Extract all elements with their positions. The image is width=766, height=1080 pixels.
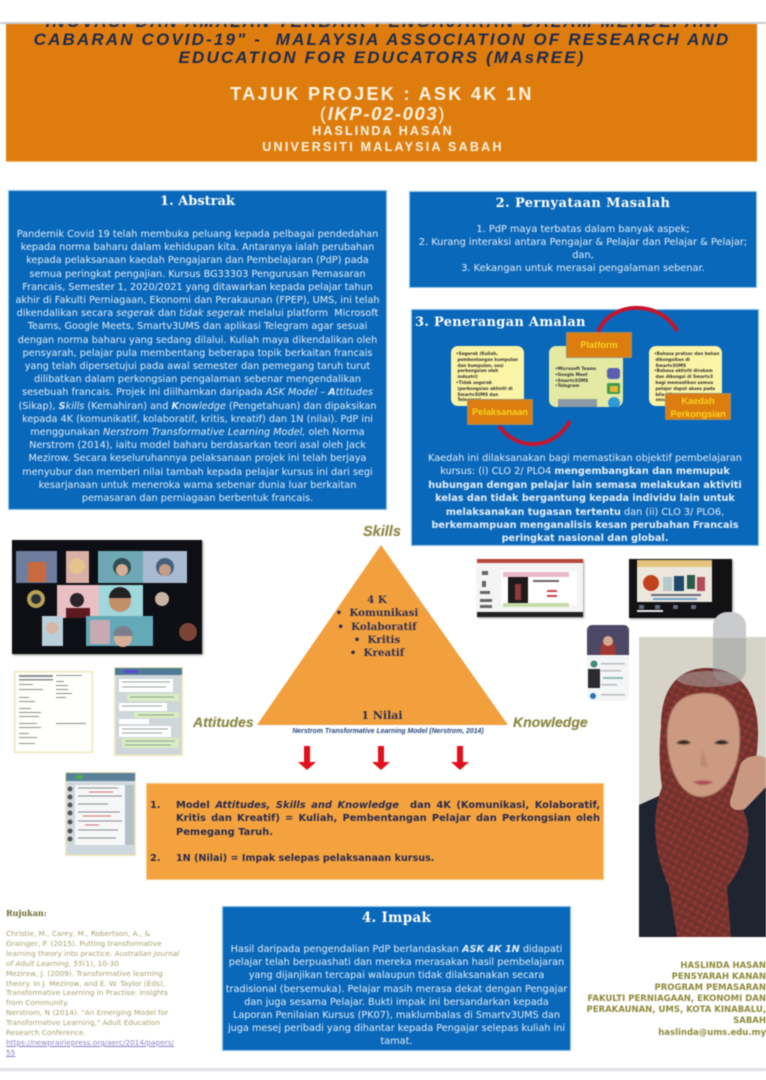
screenshot: video lecture slide	[628, 558, 734, 620]
triangle text: komunikasi: • Komunikasi	[336, 607, 418, 619]
abstract text: pemasaran dan perniagaan berbentuk francais.	[82, 493, 313, 504]
explanation text: hubungan dengan pelajar lain semasa melakukan aktiviti	[428, 480, 742, 491]
abstract text: semua peringkat pengajian. Kursus BG33303 Pengurusan Pemasaran	[29, 269, 366, 280]
label: platform: Platform	[580, 340, 618, 350]
label: platform	[566, 332, 632, 358]
impact text: pelajar telah berpuashati dan mereka merasakan hasil pembelajaran	[229, 957, 564, 968]
screenshot: presentation slide	[476, 558, 586, 620]
card: pelaksanaan text: perkongsian oleh	[457, 368, 498, 373]
problem list: 1. PdP maya terbatas dalam banyak aspek;	[476, 224, 690, 235]
hijab	[655, 668, 758, 937]
impact text	[226, 944, 568, 1047]
conference title	[34, 30, 730, 68]
card: kaedah perkongsian text: •Bahasa pratsac dan bahan	[654, 351, 719, 356]
abstract text: dikendalikan secara segerak dan tidak segerak melalui platform Microsoft	[17, 308, 378, 319]
card: platform list	[549, 346, 623, 407]
card: kaedah perkongsian text: sesuai	[655, 397, 671, 402]
problem list: 2. Kurang interaksi antara Pengajar & Pelajar dan Pelajar & Pelajar;	[419, 237, 747, 248]
item two number: 2.	[150, 853, 161, 864]
heading: impak: 4. Impak	[362, 910, 431, 926]
card: kaedah perkongsian text: bila-bila masa yang	[655, 392, 702, 397]
abstract text: dengan norma baharu yang sedang dilalui. Kuliah maya dikendalikan oleh	[18, 335, 377, 346]
card: kaedah perkongsian text: bagi memastikan semua	[655, 380, 713, 385]
heading: penerangan amalan: 3. Penerangan Amalan	[415, 315, 586, 330]
card: pelaksanaan text: industri)	[457, 374, 478, 379]
explanation text	[428, 452, 742, 544]
screenshot: course document	[14, 670, 94, 754]
label: pelaksanaan	[467, 399, 533, 425]
impact text: juga mesej peribadi yang dihantar kepada Pengajar selepas kuliah ini	[228, 1023, 565, 1034]
references list: of Adult Learning, 55(1), 10-30	[6, 959, 119, 968]
references list: Grainger, P. (2015). Putting transformative	[6, 939, 162, 948]
photo: author portrait	[638, 636, 766, 938]
heading: abstrak: 1. Abstrak	[160, 194, 235, 209]
author contact: PENSYARAH KANAN	[672, 972, 766, 982]
item one text: Kritis dan Kreatif) = Kuliah, Pembentangan Pelajar dan Perkongsian oleh	[176, 813, 600, 824]
abstract text: Mezirow. Secara keseluruhannya pelaksanaan projek ini telah berjaya	[28, 453, 366, 464]
panel: abstrak	[8, 190, 387, 510]
references list: Transformative Learning in Practise: Insights	[6, 988, 168, 997]
diagram: ask triangle	[256, 544, 508, 726]
impact text: tradisional (bersemuka). Pelajar masih merasa dekat dengan Pengajar	[226, 984, 567, 995]
card: pelaksanaan text: Smartv3UMS dan	[457, 392, 498, 397]
explanation text: peringkat nasional dan global.	[502, 533, 668, 544]
conference title: CABARAN COVID-19" - MALAYSIA ASSOCIATION OF RESEARCH AND	[34, 30, 730, 49]
heading: pernyataan masalah: 2. Pernyataan Masalah	[496, 196, 670, 211]
card: platform list: •Microsoft Teams	[555, 366, 596, 371]
card: platform list: •Smartv3UMS	[555, 378, 588, 383]
abstract text: Teams, Google Meets, Smartv3UMS dan aplikasi Telegram agar sesuai	[28, 321, 367, 332]
abstract text: (Sikap), Skills (Kemahiran) and Knowledge (Pengetahuan) dan dipaksikan	[18, 401, 376, 412]
card: pelaksanaan text: Telegram)	[457, 397, 481, 402]
references list: Research Conference.	[6, 1028, 86, 1037]
panel: impak	[222, 906, 571, 1051]
card: kaedah perkongsian text: Smartv3UMS	[655, 363, 686, 368]
item one text: Pemegang Taruh.	[176, 827, 273, 838]
card: platform list: •Google Meet	[555, 372, 587, 377]
label: kaedah perkongsian: Perkongsian	[670, 408, 726, 418]
abstract text: dilibatkan dalam perkongsian pengalaman sebenar mengendalikan	[34, 374, 361, 385]
author contact	[586, 960, 766, 1038]
heading: rujukan: Rujukan:	[6, 908, 47, 918]
label: pelaksanaan: Pelaksanaan	[472, 407, 528, 417]
arrows: red curved flow	[497, 305, 680, 447]
card: pelaksanaan text: dan kumpulan, sesi	[457, 363, 503, 368]
triangle text: 4K: 4 K	[367, 594, 387, 606]
impact text: Hasil daripada pengendalian PdP berlandaskan ASK 4K 1N didapati	[231, 944, 562, 955]
references list: Transformative Learning," Adult Education	[6, 1018, 160, 1027]
panel: pernyataan masalah	[409, 191, 757, 288]
face	[667, 693, 740, 797]
browser top line	[0, 22, 766, 24]
item one text: Model Attitudes, Skills and Knowledge dan 4K (Komunikasi, Kolaboratif,	[176, 800, 600, 811]
abstract text: menggunakan Nerstrom Transformative Learning Model, oleh Norma	[30, 427, 365, 438]
label: skills: Skills	[363, 524, 401, 540]
abstract text: kesarjanaan untuk meneroka warna sebenar dunia luar berkaitan	[39, 480, 356, 491]
screenshot: telegram chat two	[64, 772, 136, 856]
card: pelaksanaan text	[451, 346, 524, 406]
author contact: haslinda@ums.edu.my	[658, 1028, 766, 1038]
label: knowledge: Knowledge	[513, 714, 588, 730]
item one number: 1.	[150, 800, 161, 811]
project code: (IKP-02-003)	[320, 103, 446, 124]
icons: platform apps	[558, 367, 621, 408]
card: pelaksanaan text: •Tidak segerak	[456, 380, 492, 385]
author name: HASLINDA HASAN	[312, 124, 454, 138]
references list	[6, 929, 180, 1058]
references list: https://newprairiepress.org/aerc/2014/papers/	[6, 1038, 174, 1047]
references list: Mezirow, J. (2009). Transformative learning	[6, 969, 163, 978]
explanation text: melaksanakan tugasan tertentu dan (ii) CLO 3/ PLO6,	[446, 507, 724, 518]
abstract text: kepada 4K (komunikatif, kolaboratif, kritis, kreatif) dan 1N (nilai). PdP ini	[22, 414, 373, 425]
abstract text: Francais, Semester 1, 2020/2021 yang ditawarkan kepada pelajar tahun	[22, 282, 373, 293]
references list: Nerstrom, N (2014). "An Emerging Model for	[6, 1008, 168, 1017]
abstract text: akhir di Fakulti Perniagaan, Ekonomi dan Perakaunan (FPEP), UMS, ini telah	[15, 295, 380, 306]
card: kaedah perkongsian text: pelajar dapat akses pada	[655, 386, 715, 391]
conference title: EDUCATION FOR EDUCATORS (MAsREE)	[179, 48, 585, 66]
card: kaedah perkongsian text: dan dikongsi di Smartv3	[655, 374, 713, 379]
author contact: SABAH	[733, 1016, 766, 1026]
arrows: red down arrows	[298, 745, 470, 770]
panel: summary list	[146, 783, 604, 880]
card: kaedah perkongsian text: dikongsikan di	[655, 357, 690, 362]
impact text: tamat.	[380, 1036, 412, 1047]
references list: from Community.	[6, 998, 69, 1007]
explanation text: berkemampuan menganalisis kesan perubahan Francais	[432, 520, 738, 531]
explanation text: kelas dan tidak bergantung kepada individu lain untuk	[435, 493, 735, 504]
card: pelaksanaan text: pembentangan kumpulan	[457, 357, 518, 362]
item one text	[176, 800, 600, 838]
problem list: dan,	[572, 250, 594, 261]
jacket	[639, 769, 766, 937]
author contact: PERAKAUNAN, UMS, KOTA KINABALU,	[587, 1005, 766, 1015]
scrollbar handle above photo	[713, 612, 746, 638]
screenshot: online class	[11, 539, 205, 657]
triangle text: kritis: • Kritis	[354, 634, 400, 646]
project title: TAJUK PROJEK : ASK 4K 1N	[230, 84, 534, 104]
author contact: HASLINDA HASAN	[680, 961, 766, 971]
impact text: yang dijanjikan tercapai walaupun tidak dilaksanakan secara	[249, 970, 544, 981]
abstract text: Nerstrom (2014), iaitu model baharu berdasarkan teori asal oleh Jack	[29, 440, 366, 451]
item two text: 1N (Nilai) = Impak selepas pelaksanaan kursus.	[176, 853, 434, 864]
label: kaedah perkongsian: Kaedah	[681, 396, 715, 406]
author contact: FAKULTI PERNIAGAAN, EKONOMI DAN	[588, 994, 766, 1004]
header banner	[6, 24, 757, 162]
card: pelaksanaan text: •Segerak (Kuliah,	[456, 351, 498, 356]
triangle text: kolaboratif: • Kolaboratif	[337, 621, 417, 633]
references list: Christie, M., Carey, M., Robertson, A., &	[6, 929, 150, 938]
triangle text: 1 nilai: 1 Nilai	[361, 709, 403, 722]
abstract text: sesebuah francais. Projek ini diilhamkan daripada ASK Model – Attitudes	[22, 387, 373, 398]
screenshot: phone profile	[586, 624, 630, 700]
panel: penerangan amalan	[411, 309, 759, 546]
card: kaedah perkongsian text: •Bahasa aktiviti dirakam	[654, 368, 713, 373]
abstract text: pensyarah, pelajar pula membentang beberapa topik berkaitan francais	[23, 348, 372, 359]
card: pelaksanaan text: (perkongsian aktiviti di	[457, 386, 513, 391]
label: attitudes: Attitudes	[193, 714, 254, 730]
triangle text: kreatif: • Kreatif	[350, 647, 404, 659]
card: kaedah perkongsian text	[649, 346, 722, 406]
abstract text	[15, 228, 380, 504]
problem list	[418, 224, 747, 274]
impact text: Laporan Penilaian Kursus (PK07), maklumbalas di Smartv3UMS dan	[233, 1010, 560, 1021]
author contact: PROGRAM PEMASARAN	[654, 983, 766, 993]
impact text: dan juga sesama Pelajar. Bukti impak ini bersandarkan kepada	[244, 997, 549, 1008]
label: kaedah perkongsian	[665, 393, 731, 420]
bottom page line	[0, 1068, 766, 1071]
abstract text: Pandemik Covid 19 telah membuka peluang kepada pelbagai pendedahan	[17, 229, 378, 240]
card: platform list: •Telegram	[555, 383, 579, 388]
scrollbar overlay	[713, 612, 746, 683]
abstract text: kepada pelaksanaan kaedah Pengajaran dan Pembelajaran (PdP) pada	[26, 255, 369, 266]
university: UNIVERSITI MALAYSIA SABAH	[262, 140, 504, 154]
abstract text: menyubur dan memberi nilai tambah kepada pelajar kursus ini dari segi	[22, 467, 373, 478]
explanation text: kursus: (i) CLO 2/ PLO4 mengembangkan dan memupuk	[440, 466, 730, 477]
abstract text: yang telah dipersetujui pada awal semester dan pemegang taruh turut	[25, 361, 370, 372]
screenshot: telegram chat one	[114, 666, 184, 756]
references list: 55	[6, 1048, 15, 1057]
explanation text: Kaedah ini dilaksanakan bagi memastikan objektif pembelajaran	[428, 453, 742, 464]
abstract text: kepada norma baharu dalam kehidupan kita. Antaranya ialah perubahan	[21, 242, 374, 253]
problem list: 3. Kekangan untuk merasai pengalaman sebenar.	[461, 263, 705, 274]
caption: nerstrom model: Nerstrom Transformative Learning Model (Nerstrom, 2014)	[292, 728, 484, 735]
hand	[730, 756, 766, 810]
references list: theory. In J. Mezirow, and E. W. Taylor (Eds),	[6, 979, 165, 988]
references list: learning theory into practice. Australian Journal	[6, 949, 179, 958]
